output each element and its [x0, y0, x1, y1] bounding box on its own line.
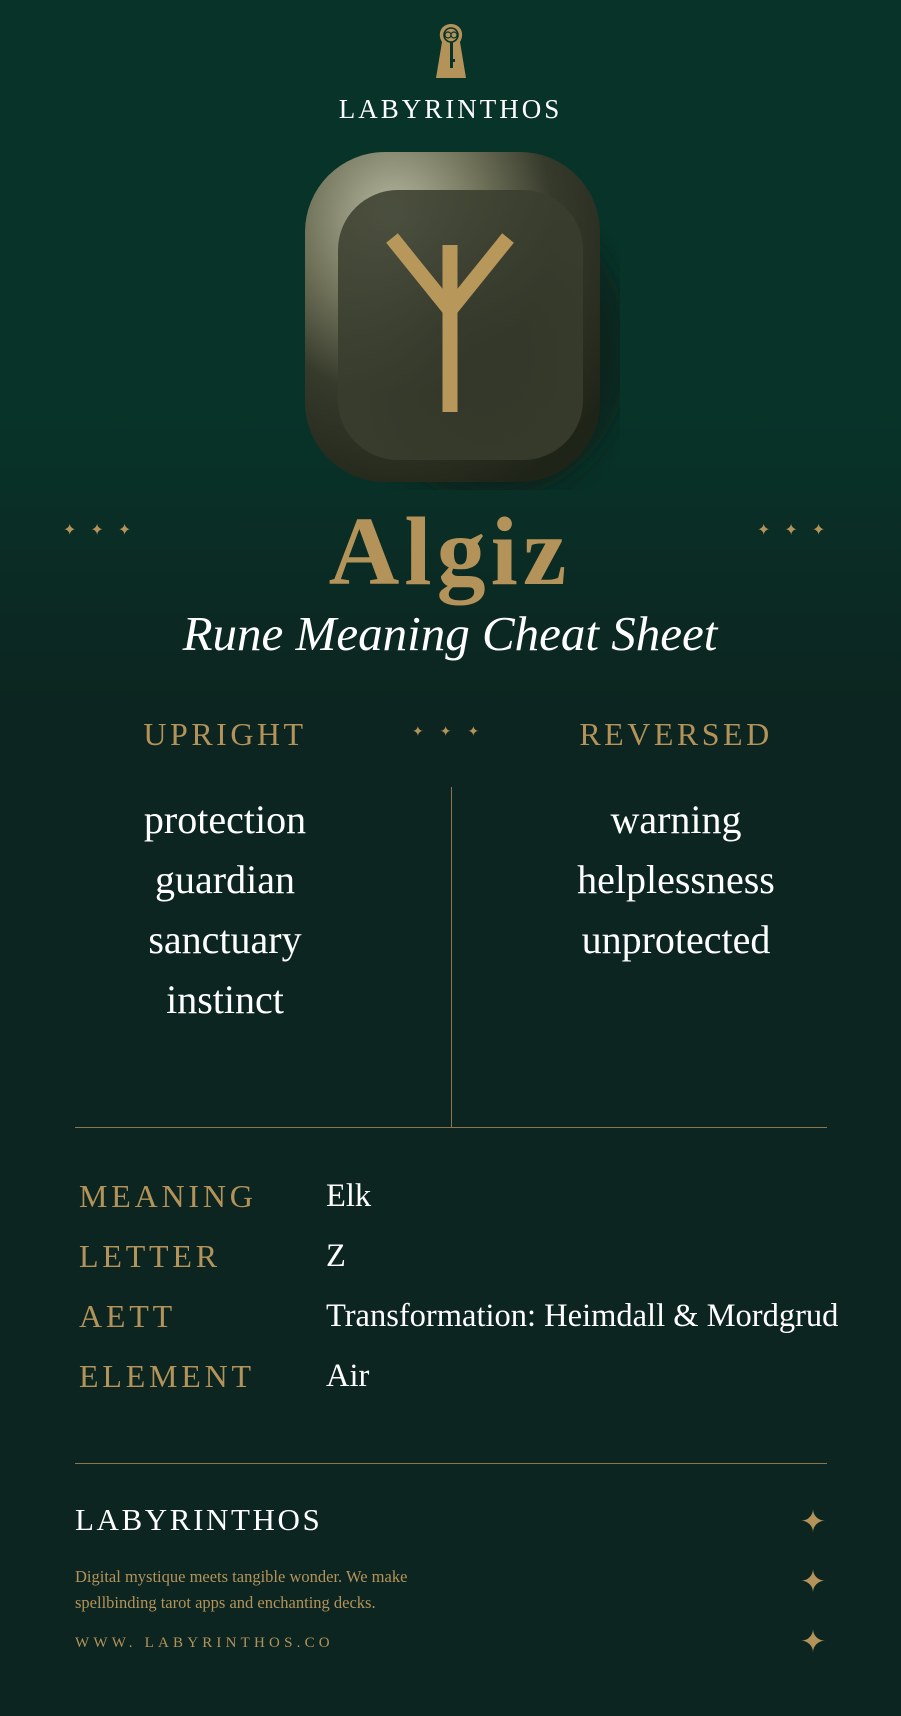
row: meaning: Elk	[326, 1178, 371, 1214]
upright keywords: sanctuary	[148, 917, 302, 962]
reversed keywords	[577, 797, 775, 962]
info table	[79, 1178, 838, 1394]
footer stars: ✦	[800, 1564, 826, 1599]
row: aett	[79, 1298, 838, 1334]
footer brand: LABYRINTHOS	[75, 1502, 322, 1537]
upright keywords	[144, 797, 306, 1022]
upright keywords: guardian	[155, 857, 295, 902]
footer url: WWW. LABYRINTHOS.CO	[75, 1635, 334, 1651]
row: aett: Transformation: Heimdall & Mordgrud	[326, 1298, 838, 1334]
row: element: Air	[326, 1358, 369, 1394]
row: element: ELEMENT	[79, 1358, 255, 1394]
footer stars: ✦	[800, 1504, 826, 1539]
footer stars	[800, 1504, 826, 1659]
subtitle: Rune Meaning Cheat Sheet	[183, 606, 717, 661]
heading: upright: UPRIGHT	[143, 716, 307, 752]
icon: algiz rune	[392, 238, 508, 412]
reversed keywords: helplessness	[577, 857, 775, 902]
decorative stars right: ✦✦✦	[757, 522, 839, 539]
row: element	[79, 1358, 370, 1394]
title: Algiz	[329, 498, 571, 606]
reversed keywords: warning	[610, 797, 742, 842]
brand name top: LABYRINTHOS	[339, 94, 562, 124]
row: meaning: MEANING	[79, 1178, 257, 1214]
row: aett: AETT	[79, 1298, 176, 1334]
logo: key icon	[436, 24, 466, 78]
reversed keywords: unprotected	[582, 917, 770, 962]
footer stars: ✦	[800, 1624, 826, 1659]
row: meaning	[79, 1178, 372, 1214]
footer tagline: Digital mystique meets tangible wonder. We make spellbinding tarot apps and enchanting decks.	[75, 1567, 407, 1612]
row: letter: Z	[326, 1238, 346, 1274]
heading: reversed: REVERSED	[579, 716, 773, 752]
rune stone image	[305, 152, 620, 490]
decorative stars left: ✦✦✦	[63, 522, 145, 539]
row: letter: LETTER	[79, 1238, 221, 1274]
decorative stars middle: ✦✦✦	[412, 725, 495, 740]
upright keywords: instinct	[166, 977, 284, 1022]
upright keywords: protection	[144, 797, 306, 842]
row: letter	[79, 1238, 346, 1274]
